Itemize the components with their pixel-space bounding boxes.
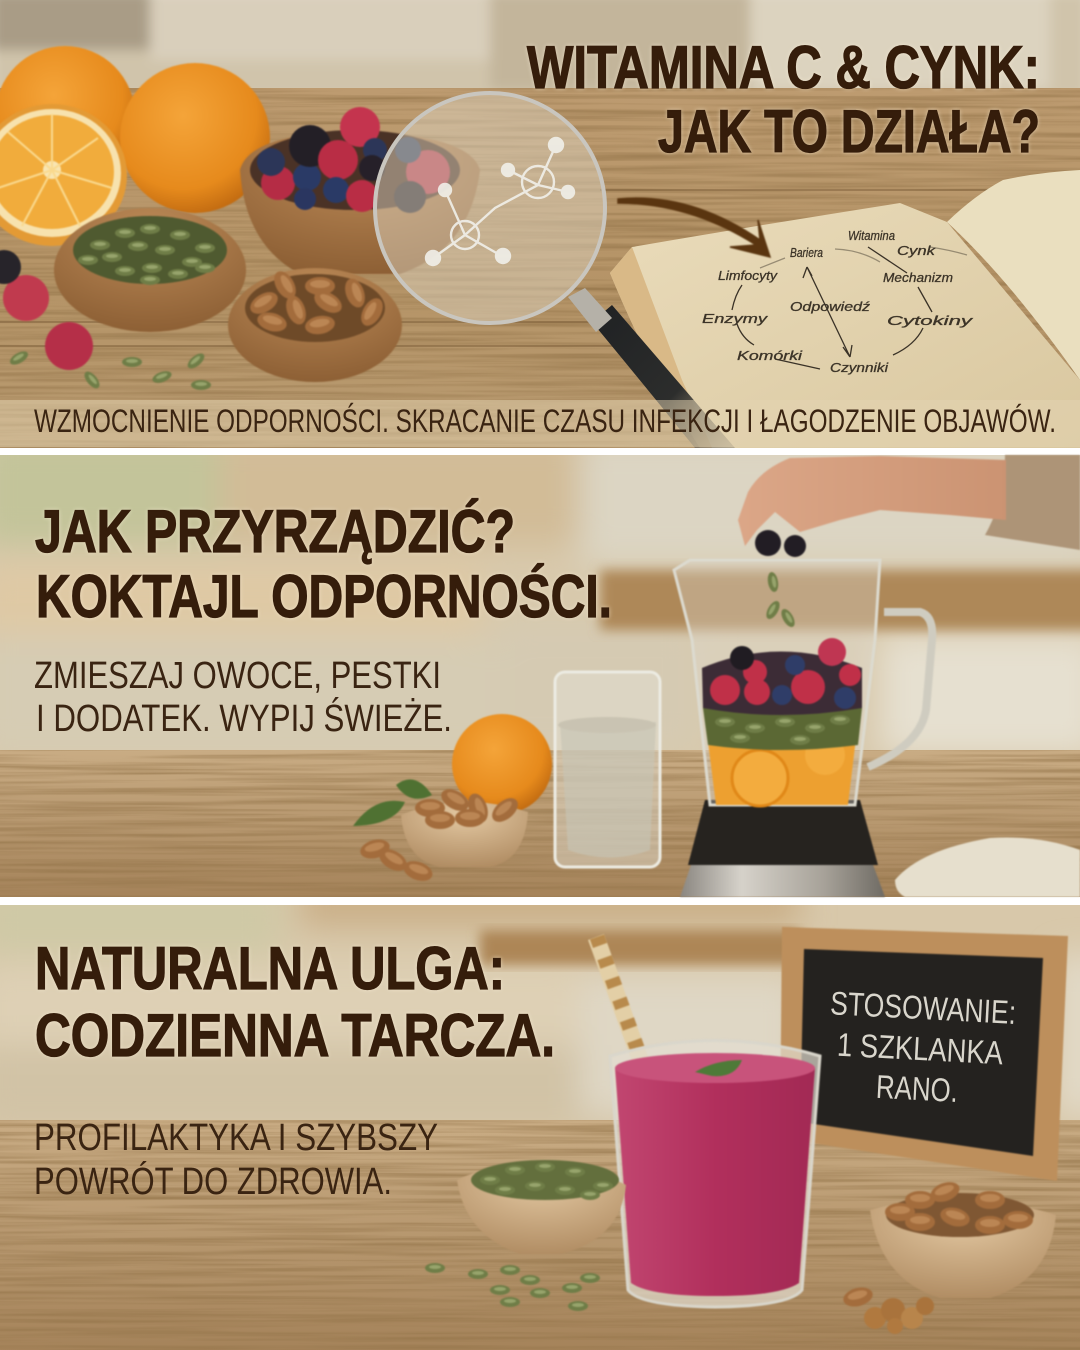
panel: how it works [0,0,1080,448]
icon: whole oranges [0,46,270,213]
icon: cloth [895,838,1080,897]
text block: I DODATEK. WYPIJ ŚWIEŻE. [36,695,452,740]
icon: magnifying glass [375,93,735,448]
icon: water glass [555,672,660,867]
chalkboard text: 1 SZKLANKA [836,1026,1004,1071]
icon: berries bowl [240,107,480,274]
chalkboard [780,927,1068,1181]
icon: smoothie glass [610,1040,820,1307]
heading [527,34,1040,165]
diagram labels: Cynk [897,243,937,258]
molecule [426,138,574,265]
diagram labels: Czynniki [830,360,889,375]
text block [34,1117,438,1203]
icon: loose berries and seeds [0,250,211,391]
icon: hand with berry [738,455,1080,557]
diagram labels: Witamina [848,228,895,243]
blurred kitchen background [0,885,1080,1350]
panel: how to prepare [0,435,1080,897]
heading [35,498,612,630]
blurred kitchen background [0,435,1080,897]
diagram labels [702,228,975,375]
arrow: brown pointer [618,198,770,257]
diagram labels: Cytokiny [887,313,975,328]
icon: loose nuts [841,1284,934,1334]
chalkboard text [825,984,1017,1112]
diagram labels: Komórki [737,348,804,363]
icon: open book with diagram [610,170,1080,448]
icon: leaves [353,779,432,826]
diagram labels: Bariera [790,245,823,260]
icon: loose nuts [358,836,435,885]
icon: straw [588,934,652,1072]
icon: blender [674,560,932,897]
icon: nut bowl [870,1178,1056,1298]
text block: POWRÓT DO ZDROWIA. [34,1160,392,1203]
wooden table [0,88,1080,448]
icon: orange [452,714,552,814]
diagram arrows [732,247,967,369]
heading: NATURALNA ULGA: [35,935,505,1002]
chalkboard text: STOSOWANIE: [829,984,1017,1031]
heading: JAK PRZYRZĄDZIĆ? [35,498,515,565]
text block [34,655,452,740]
chalkboard text: RANO. [875,1068,959,1109]
icon: loose seeds [425,1263,600,1311]
icon: orange slice [0,104,127,246]
text block: ZMIESZAJ OWOCE, PESTKI [34,655,441,697]
icon: pumpkin seed bowl [54,208,246,332]
diagram labels: Enzymy [702,311,769,326]
panel: natural relief [0,885,1080,1350]
icon: almond bowl [228,268,402,382]
text block: PROFILAKTYKA I SZYBSZY [34,1117,438,1159]
icon: almond bowl [401,785,528,867]
heading: KOKTAJL ODPORNOŚCI. [36,563,612,630]
heading: CODZIENNA TARCZA. [35,1002,555,1069]
diagram labels: Mechanizm [883,270,953,285]
icon: pumpkin seed bowl [457,1160,626,1254]
kitchen background [0,0,1080,100]
caption backing glow [0,400,1080,447]
diagram labels: Odpowiedź [790,299,871,314]
diagram labels: Limfocyty [718,268,779,283]
heading [35,935,555,1069]
blender fruit layers [708,738,856,805]
